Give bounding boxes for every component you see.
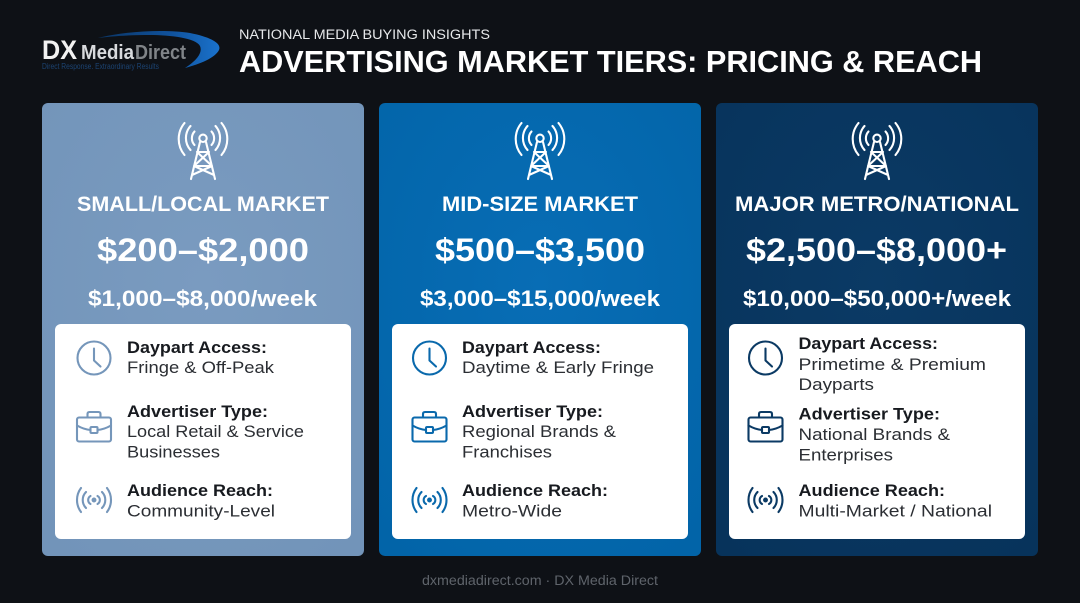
logo wordmark: Direct — [135, 42, 186, 64]
details box — [729, 324, 1025, 539]
audience reach: Community-Level — [127, 502, 275, 520]
advertiser type: National Brands & — [798, 425, 951, 444]
footer: dxmediadirect.com · DX Media Direct — [422, 573, 658, 588]
daypart access: Daytime & Early Fringe — [462, 358, 654, 377]
audience reach: Audience Reach: — [127, 481, 273, 500]
card background — [379, 103, 701, 556]
daypart access — [798, 334, 986, 394]
audience reach: Audience Reach: — [798, 481, 945, 500]
tier heading: SMALL/LOCAL MARKET — [77, 193, 329, 216]
icon: signal waves — [748, 488, 782, 512]
icon: broadcast tower — [179, 123, 227, 179]
audience reach: Multi-Market / National — [798, 502, 992, 520]
advertiser type — [462, 402, 617, 462]
logo tagline: Direct Response. Extraordinary Results — [42, 62, 159, 71]
icon: broadcast tower — [853, 123, 901, 179]
eyebrow heading: NATIONAL MEDIA BUYING INSIGHTS — [239, 27, 490, 42]
weekly price: $3,000–$15,000/week — [420, 286, 661, 311]
audience reach — [127, 481, 275, 520]
box background — [392, 324, 688, 539]
weekly price: $10,000–$50,000+/week — [743, 286, 1012, 311]
icon: clock — [413, 342, 446, 374]
weekly price: $1,000–$8,000/week — [88, 286, 318, 311]
tier heading: MAJOR METRO/NATIONAL — [735, 193, 1019, 216]
icon: broadcast tower — [516, 123, 564, 179]
advertiser type — [798, 404, 951, 464]
icon: signal waves — [412, 488, 446, 512]
details box — [392, 324, 688, 539]
audience reach — [462, 481, 608, 520]
audience reach: Audience Reach: — [462, 481, 608, 500]
logo swoosh — [98, 31, 219, 68]
icon: briefcase — [748, 412, 782, 442]
advertiser type: Businesses — [127, 442, 220, 462]
box background — [729, 324, 1025, 539]
daypart access: Daypart Access: — [462, 338, 601, 357]
audience reach — [798, 481, 992, 520]
audience reach: Metro-Wide — [462, 502, 562, 520]
title: ADVERTISING MARKET TIERS: PRICING & REACH — [239, 45, 982, 79]
advertiser type — [127, 402, 304, 462]
panel: small/local market — [42, 103, 364, 556]
price per spot: $2,500–$8,000+ — [746, 232, 1007, 268]
advertiser type: Local Retail & Service — [127, 422, 304, 441]
icon: briefcase — [412, 412, 446, 442]
daypart access: Dayparts — [798, 375, 874, 394]
card background — [42, 103, 364, 556]
daypart access — [462, 338, 654, 377]
panel: mid-size market — [379, 103, 701, 556]
icon: clock — [749, 342, 782, 374]
price per spot: $200–$2,000 — [97, 232, 309, 268]
daypart access: Daypart Access: — [127, 338, 267, 357]
daypart access: Daypart Access: — [798, 334, 938, 353]
price per spot: $500–$3,500 — [435, 232, 645, 268]
box background — [55, 324, 351, 539]
advertiser type: Advertiser Type: — [127, 402, 268, 421]
icon: clock — [78, 342, 110, 374]
logo: DX Media Direct — [42, 31, 219, 71]
icon: signal waves — [77, 488, 111, 512]
advertiser type: Advertiser Type: — [798, 404, 940, 424]
panel: major metro/national — [716, 103, 1038, 556]
tier heading: MID-SIZE MARKET — [442, 193, 638, 216]
details box — [55, 324, 351, 539]
logo wordmark: Media — [81, 42, 135, 64]
daypart access: Fringe & Off-Peak — [127, 358, 275, 377]
advertiser type: Regional Brands & — [462, 422, 617, 441]
daypart access: Primetime & Premium — [798, 355, 986, 374]
daypart access — [127, 338, 275, 377]
advertiser type: Advertiser Type: — [462, 402, 603, 421]
logo wordmark: DX — [42, 35, 77, 65]
icon: briefcase — [77, 412, 111, 442]
card background — [716, 103, 1038, 556]
advertiser type: Franchises — [462, 442, 552, 462]
logo wordmark — [42, 35, 186, 65]
advertiser type: Enterprises — [798, 446, 893, 464]
